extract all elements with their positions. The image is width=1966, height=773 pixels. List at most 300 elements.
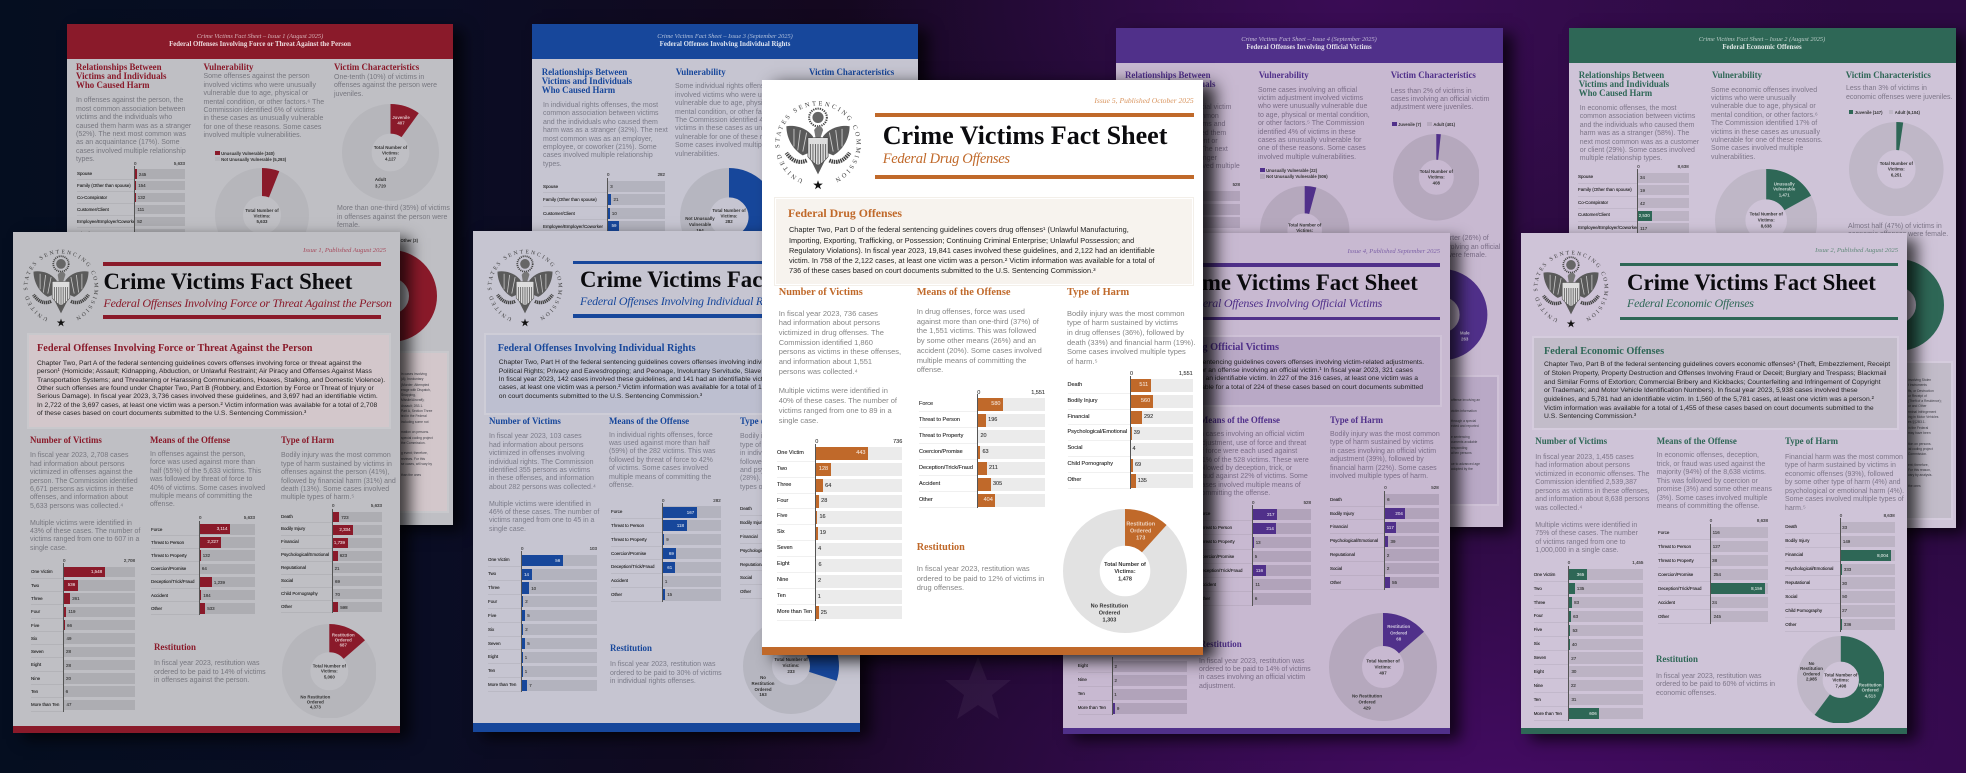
panel: front page, force or threat (red): 0	[332, 503, 334, 508]
overview heading: Federal Drug Offenses	[788, 206, 902, 220]
text: type of harm: and psychological or emotional harm	[740, 467, 854, 474]
text: relationships: as an acquaintance (17%). Some	[76, 139, 180, 146]
donut: vulnerability: 164	[696, 228, 704, 233]
text: means: trick, or fraud was used against the	[1657, 461, 1765, 468]
bar chart: type of harm: Social	[1785, 594, 1797, 599]
bar chart: type of harm: Bodily Injury	[1785, 538, 1809, 543]
bar chart: means: Other	[611, 592, 622, 597]
bar chart: number of victims: 4	[818, 546, 821, 552]
bar chart: means: 580	[991, 401, 1000, 407]
text: vulnerability: vulnerabilities.	[1711, 154, 1755, 161]
text: means	[609, 432, 715, 490]
bar chart: type of harm: Social	[1330, 566, 1342, 571]
bar chart: type of harm: 204	[1395, 511, 1403, 516]
text: vulnerability: Some economic offenses involved	[1711, 87, 1817, 94]
donut: restitution: 7,498	[1835, 683, 1846, 688]
text: type of harm: of harm.⁵	[1067, 357, 1098, 366]
bar chart: relationships: Co-Conspirator	[1578, 200, 1608, 205]
bar chart: number of victims: 25	[821, 610, 827, 616]
overview text: Chapter Two, Part H of the federal sentencing guidelines covers offenses involving individual rights (Civil Rights;	[499, 359, 834, 366]
bar chart: type of harm: 8,004	[1877, 553, 1888, 558]
bar chart: number of victims: More than Ten	[1078, 705, 1106, 710]
text: number of victims: 46% of these cases. The number of	[489, 509, 599, 516]
text: restitution: In fiscal year 2023, restitution was	[1656, 673, 1761, 680]
text: vulnerability: mental condition, or other factors.⁶	[1711, 112, 1818, 119]
text: number of victims: persons was collected.⁴	[779, 367, 858, 376]
text: means: followed by threat of force to 42%	[609, 457, 713, 464]
donut: vulnerability: Victims:	[1757, 218, 1775, 223]
header issue line: Crime Victims Fact Sheet – Issue 2 (August 2025)	[1699, 36, 1825, 43]
footnotes: than the ones	[401, 473, 421, 477]
bar chart: number of victims: 606	[1589, 711, 1597, 716]
bar chart: number of victims: Three	[1534, 600, 1545, 605]
bar chart: number of victims: Five	[31, 623, 39, 628]
donut: restitution: Victims:	[1832, 677, 1849, 682]
footer band	[13, 726, 400, 733]
donut: restitution: Restitution	[752, 681, 775, 686]
bar chart: type of harm: 30	[1842, 581, 1847, 586]
bar chart: number of victims: Four	[1534, 613, 1543, 618]
text: vulnerability: identified 4% of victims in these	[1258, 129, 1356, 136]
subtitle: Federal Offenses Involving Official Victims	[1185, 296, 1382, 310]
text: type of harm: type of harm sustained by victims in	[1785, 462, 1896, 469]
overview text: Chapter Two, Part B of the federal sentencing guidelines covers economic offenses¹ (Theft, Embezzlement, Receipt	[1544, 361, 1890, 368]
bar chart: number of victims: Nine	[1534, 683, 1543, 688]
panel: notes	[300, 353, 447, 511]
text: vulnerability: to age, physical or mental condition,	[1258, 112, 1370, 119]
text: relationships: employee, or coworker (21%). Some	[543, 144, 657, 151]
text: female share	[1848, 222, 1948, 238]
bar chart: relationships: 10	[612, 211, 617, 216]
background star watermark	[946, 663, 1010, 718]
text: vulnerability: or other factors.⁵ The Commission	[1258, 120, 1364, 127]
heading: relationships: Relationships Between	[1125, 70, 1211, 80]
bar chart: type of harm: Death	[740, 506, 752, 511]
bar chart: type of harm: 117	[1387, 525, 1394, 530]
text: juveniles	[334, 74, 437, 98]
subtitle: Federal Offenses Involving Force or Threat Against the Person	[104, 296, 392, 310]
heading: relationships: Who Caused Harm	[1125, 88, 1198, 98]
text: restitution	[154, 660, 266, 686]
heading: relationships: Victims and Individuals	[1579, 79, 1669, 89]
bar chart: relationships: 59	[612, 223, 616, 228]
heading: relationships	[76, 62, 166, 90]
donut: restitution: Victims:	[782, 663, 800, 668]
donut: sex	[400, 250, 437, 341]
text: vulnerability: involved multiple vulnerabilities.	[1258, 154, 1356, 161]
bar chart: relationships: Friend	[77, 231, 90, 236]
text: means: multiple means of committing the	[609, 474, 711, 481]
heading: type of harm: Type of Harm	[740, 416, 793, 426]
bar chart: means: 8,156	[1751, 586, 1762, 591]
bar chart: relationships: Spouse	[77, 171, 92, 176]
text: means: followed by deception, trick, or	[1198, 465, 1292, 472]
legend: vulnerability: Unusually Vulnerable (340)	[221, 150, 274, 156]
text: restitution: ordered to be paid to 60% of victims in	[1656, 681, 1775, 688]
bar chart: means: Coercion/Promise	[1658, 572, 1693, 577]
text: female share: victim adjustment were female.	[1391, 252, 1487, 259]
bar chart: means: 69	[669, 551, 674, 556]
panel: back page, individual rights (blue): 0	[607, 172, 609, 177]
title rule top	[875, 113, 1194, 117]
text: number of victims: victimized in offenses involving	[489, 450, 585, 457]
panel: front page, force or threat (red): 5,633	[244, 515, 255, 520]
title rule bottom	[875, 175, 1194, 179]
text: juveniles: cases involving an official victim	[1391, 96, 1489, 103]
bar chart: type of harm	[1785, 520, 1891, 632]
footer band	[762, 647, 1203, 655]
bar chart: number of victims: 9	[1117, 706, 1119, 711]
text: restitution: ordered to be paid to 14% of victims	[154, 669, 266, 676]
donut: vulnerability: Total Number of	[1749, 212, 1783, 217]
bar chart: type of harm: 69	[1135, 462, 1141, 468]
heading: relationships: Relationships Between	[542, 67, 627, 77]
bar chart: means: 6	[1255, 596, 1257, 601]
title rule top	[1162, 263, 1440, 267]
bar chart: means: 211	[989, 465, 998, 471]
panel: front page, economic offenses (green): 0	[1568, 560, 1570, 565]
text: number of victims: victims ranged from one to 45 in a	[489, 517, 594, 524]
seal: UNITED STATES SENTENCING COMMISSION	[488, 250, 562, 322]
bar chart: type of harm: Child Pornography	[1785, 608, 1822, 613]
bar chart: means: Threat to Property	[1199, 539, 1235, 544]
text: type of harm: death (33%) and financial harm (19%).	[1067, 338, 1195, 347]
donut: vulnerability: 1,471	[1778, 193, 1790, 198]
text: vulnerability: vulnerable due to age, physical or	[1711, 103, 1816, 110]
title: Crime Victims Fact Sheet	[1169, 270, 1418, 295]
bar chart: means: Coercion/Promise	[919, 449, 963, 455]
text: number of victims: was collected.⁴	[1535, 505, 1582, 512]
bar chart: means: Accident	[1658, 600, 1675, 605]
bar chart: number of victims	[488, 553, 563, 692]
bar chart: number of victims: 28	[821, 498, 827, 504]
bar chart: relationships: 34	[1640, 175, 1645, 180]
header band	[532, 24, 918, 59]
text: number of victims: single case.	[779, 416, 818, 425]
footnotes: tion on persons.	[1908, 442, 1931, 446]
footnotes	[1908, 378, 1942, 488]
bar chart: number of victims: More than Ten	[777, 609, 812, 615]
overview text	[1000, 359, 1424, 392]
footnotes: Part A, Section Three	[401, 409, 432, 413]
overview text: U.S. Sentencing Commission.³	[1544, 413, 1636, 420]
text: vulnerability: one of these reasons. Some cases	[1258, 145, 1366, 152]
donut: age: Total Number of	[373, 144, 407, 150]
text: means: of force were each used against	[1198, 448, 1297, 455]
heading: means: Means of the Offense	[150, 435, 230, 445]
bar chart: relationships: Employee/Employer/Coworker	[1578, 225, 1638, 230]
panel: front page, official victims (purple): 528	[1304, 500, 1311, 505]
overview text	[789, 225, 1155, 277]
panel: overview	[29, 335, 389, 427]
bar chart: type of harm: Reputational	[1330, 552, 1355, 557]
donut: age: 407	[397, 120, 405, 125]
bar chart: type of harm: Other	[281, 604, 292, 609]
footnotes: (A); Involuntary	[401, 377, 423, 381]
footnotes: ected and reported	[1451, 424, 1479, 428]
bar chart: type of harm: Bodily Injury	[1330, 511, 1354, 516]
bar chart: means: Threat to Person	[919, 417, 960, 423]
panel: back page, economic offenses (green)	[1569, 28, 1956, 528]
text: relationships: victims and the individuals who	[76, 114, 172, 121]
footnotes: ffs, or Destruction	[1908, 389, 1934, 393]
title rule bottom	[1620, 317, 1898, 320]
donut: restitution: No Restitution	[1091, 603, 1129, 609]
text: relationships: In cases involving an official victim	[1125, 104, 1231, 111]
bar chart: relationships: Customer/Client	[77, 207, 109, 212]
bar chart: number of victims: 66	[67, 623, 72, 628]
overview text: Chapter Two, Part A of the federal sentencing guidelines covers offenses involving victim-related adjustments.	[1096, 359, 1424, 366]
text: number of victims	[779, 309, 901, 425]
bar chart: type of harm	[1330, 493, 1405, 590]
overview text: on court documents submitted to the U.S. Sentencing Commission.³	[499, 393, 702, 400]
text: juveniles: adjustment were juveniles.	[1391, 104, 1473, 111]
donut: vulnerability: Not Unusually	[685, 216, 715, 221]
bar chart: number of victims: 2	[1114, 664, 1117, 669]
donut: age: Victims:	[1428, 175, 1445, 180]
bar chart: type of harm: 333	[1844, 567, 1851, 572]
text: means: was used against more than half	[609, 440, 710, 447]
overview text: In 2,722 of the 3,697 cases, at least one victim was a person.² Victim information was available for a total of 2,708	[37, 402, 377, 409]
panel: center page, federal drug offenses (orange): 1,551	[1031, 390, 1045, 396]
bar chart: number of victims: Six	[488, 627, 494, 632]
text: means: adjustment, use of force and threat	[1198, 440, 1306, 447]
bar chart: means: Threat to Person	[1658, 544, 1691, 549]
bar chart: number of victims: 83	[1574, 600, 1579, 605]
text: vulnerability: cases as unusually vulnerable for	[1258, 137, 1362, 144]
text: vulnerability: vulnerable for one of these reasons.	[1711, 137, 1823, 144]
bar chart: means	[151, 523, 230, 615]
text: type of harm: adjustment (39%), followed by	[1330, 456, 1424, 463]
heading: vulnerability: Vulnerability	[676, 67, 726, 77]
panel: front page, official victims (purple)	[1063, 233, 1450, 734]
text: vulnerability: victims in these cases as unusually	[675, 125, 784, 132]
bar chart: means: Deception/Trick/Fraud	[1199, 568, 1242, 573]
bar chart: means: 3,114	[217, 526, 228, 531]
bar chart: number of victims: Eight	[1078, 663, 1088, 668]
text: number of victims: In fiscal year 2023, 736 cases	[779, 309, 878, 318]
bar chart: relationships: Spouse	[1578, 174, 1593, 179]
bar chart: number of victims: 40	[1572, 642, 1577, 647]
bar chart: type of harm: 598	[340, 605, 348, 610]
bar chart: number of victims: One Victim	[777, 450, 804, 456]
donut: restitution: Victims:	[1374, 664, 1392, 669]
text: relationships: adjustment, the most common	[1125, 113, 1219, 120]
donut: vulnerability: 8,638	[1760, 224, 1772, 229]
panel: front page, individual rights (blue)	[473, 231, 860, 732]
text: type of harm: economic offenses (93%), followed	[1785, 471, 1893, 478]
text: restitution: in cases involving an official victim	[1199, 674, 1305, 681]
bar chart: type of harm: Financial	[281, 539, 299, 544]
text: juveniles: economic offenses were juveniles.	[1846, 94, 1952, 101]
text: type of harm: types of harm.⁵	[740, 484, 787, 491]
overview heading: Federal Offenses Involving Official Victims	[1089, 342, 1279, 353]
text: number of victims: had information about persons	[1535, 462, 1630, 469]
text: means: In drug offenses, force was used	[917, 307, 1025, 316]
heading: relationships: Relationships Between	[1579, 70, 1664, 80]
text: relationships: association between victims and	[1125, 121, 1225, 128]
bar chart: number of victims: 53	[1573, 628, 1578, 633]
text: female share	[337, 204, 450, 229]
title rule bottom	[573, 314, 851, 318]
bar chart: type of harm: Financial	[1330, 524, 1348, 529]
heading: restitution: Restitution	[154, 642, 196, 652]
text: relationships: and the individuals who caused them	[543, 119, 658, 126]
text: vulnerability: Some offenses against the person	[204, 73, 310, 80]
bar chart: relationships: 132	[138, 195, 145, 200]
issue date: Issue 1, Published August 2025	[303, 247, 386, 254]
text: type of harm	[1067, 309, 1195, 367]
text: type of harm: in drug offenses (36%), followed by	[1067, 328, 1184, 337]
bar chart: relationships: 111	[137, 207, 144, 212]
text: means: committing the offense.	[1198, 490, 1270, 497]
bar chart: type of harm: Child Pornography	[281, 591, 318, 596]
bar chart: means: 20	[980, 433, 987, 439]
bar chart: means: Other	[151, 606, 162, 611]
donut: restitution: Restitution	[1387, 624, 1410, 629]
text: relationships: and the individuals who caused them	[1580, 122, 1694, 129]
bar chart: number of victims: Ten	[488, 668, 495, 673]
donut: restitution: 1,303	[1103, 617, 1117, 623]
text: relationships: the individuals who caused them	[1125, 130, 1226, 137]
bar chart: number of victims	[1534, 568, 1599, 721]
bar chart: relationships: 42	[1640, 200, 1645, 206]
heading: relationships: Who Caused Harm	[76, 80, 149, 90]
bar chart: type of harm: Financial	[1068, 414, 1090, 420]
bar chart: means: Deception/Trick/Fraud	[919, 465, 973, 471]
legend: vulnerability: Not Unusually Vulnerable (506)	[1266, 174, 1328, 179]
bar chart: number of victims: Two	[777, 466, 787, 472]
donut: restitution	[1796, 636, 1884, 723]
panel: front page, official victims (purple): 0	[1252, 500, 1254, 505]
footnotes: cuments available	[1451, 440, 1477, 444]
bar chart: number of victims: 6	[818, 562, 822, 568]
panel: back page, official victims (purple)	[1116, 28, 1503, 527]
text: vulnerability: Some cases involving an official	[1258, 87, 1357, 94]
text: relationships: In offenses against the person, the	[76, 97, 183, 104]
heading: type of harm: Type of Harm	[1330, 415, 1383, 425]
bar chart: type of harm: 336	[1844, 622, 1851, 627]
subtitle: Federal Drug Offenses	[883, 151, 1010, 167]
text: vulnerability: victims in these cases as unusually	[1711, 129, 1820, 136]
text: number of victims: 43% of these cases. The number of	[30, 528, 140, 535]
bar chart: number of victims: 2	[525, 627, 528, 632]
bar chart: type of harm: 149	[1843, 539, 1850, 544]
bar chart: number of victims: 128	[819, 466, 828, 472]
header title line: Federal Economic Offenses	[1722, 44, 1802, 51]
title rule top	[103, 262, 381, 266]
bar chart: number of victims: Ten	[1078, 691, 1085, 696]
bar chart: number of victims: 22	[1571, 683, 1576, 688]
panel: back page, force or threat (red): 0	[134, 161, 136, 166]
text: juveniles: juveniles.	[334, 91, 363, 98]
donut: restitution: Total Number of	[774, 657, 808, 662]
footnotes: ue to advanced age	[1451, 462, 1480, 466]
text: type of harm: Bodily injury was the most common	[740, 433, 850, 440]
footnotes: responding	[1451, 446, 1467, 450]
donut: restitution	[1329, 613, 1437, 721]
donut: vulnerability: Unusually	[1773, 182, 1795, 187]
text: type of harm: psychological or emotional harm (4%).	[1785, 488, 1904, 495]
text: means: means of committing the offense.	[1657, 503, 1760, 510]
footnotes: Commission.	[1908, 452, 1927, 456]
bar chart: number of victims: Ten	[31, 689, 38, 694]
bar chart: type of harm: 6	[1387, 497, 1390, 502]
footnotes: e sentencing	[1451, 435, 1470, 439]
text: vulnerability	[204, 72, 324, 139]
bar chart: number of victims: 49	[66, 636, 71, 641]
panel: back page, official victims (purple): 0	[1190, 182, 1192, 187]
seal: UNITED STATES SENTENCING COMMISSION	[24, 250, 98, 322]
overview text: information was available for a total of 224 of these cases based on court documents submitted	[1138, 384, 1423, 391]
heading: means: Means of the Offense	[917, 287, 1010, 298]
text: number of victims: victimized in offenses against the	[30, 469, 133, 476]
bar chart: type of harm: Reputational	[740, 562, 765, 567]
bar chart: type of harm	[1068, 378, 1153, 489]
text: juveniles	[1846, 84, 1952, 101]
overview text: In fiscal year 2023, 142 cases involved these guidelines, and 141 had an identifiable victim. In 102 of the 141	[499, 376, 824, 383]
footnotes	[401, 372, 433, 477]
bar chart: number of victims: 14	[524, 572, 529, 577]
text: juveniles: Less than 2% of victims in	[1391, 88, 1472, 95]
panel: front page, force or threat (red): 0	[199, 515, 201, 520]
text: relationships	[1580, 104, 1699, 162]
text: type of harm: type of harm sustained by victims	[1067, 318, 1178, 327]
text: means: (3%). Some cases involved multiple	[1657, 495, 1768, 502]
text: means	[1198, 431, 1309, 499]
text: relationships: most common was as an employer,	[543, 136, 653, 143]
bar chart: number of victims: Three	[31, 596, 43, 601]
header band	[1569, 28, 1956, 63]
bar chart: means: Force	[1199, 511, 1210, 516]
donut: restitution: Ordered	[1099, 610, 1120, 616]
donut: restitution: 5,060	[324, 674, 335, 679]
overview text: Chapter Two, Part D of the federal sentencing guidelines covers drug offenses¹ (Unlawful Manufacturing,	[789, 225, 1129, 234]
bar chart: means: 118	[677, 523, 684, 528]
text: relationships: multiple relationship types.	[1580, 155, 1662, 162]
bar chart: type of harm: Psychological/Emotional	[1068, 429, 1127, 435]
bar chart: relationships: Co-Conspirator	[77, 195, 107, 200]
footnotes: al ten persons	[1451, 451, 1472, 455]
text: relationships: cases involved multiple relationship	[76, 148, 186, 155]
footnotes: offense involving an	[1451, 398, 1480, 402]
bar chart: number of victims: Six	[31, 636, 37, 641]
text: number of victims: of victims ranged from one to	[1535, 539, 1626, 546]
bar chart: means	[611, 505, 697, 602]
text: type of harm	[281, 452, 396, 503]
header issue line: Crime Victims Fact Sheet – Issue 4 (September 2025)	[1241, 36, 1377, 43]
bar chart: means: 127	[1713, 544, 1720, 549]
bar chart: relationships	[1125, 189, 1190, 229]
donut: age: Total Number of	[1880, 161, 1913, 166]
donut: restitution: No Restitution	[300, 694, 330, 699]
panel: front page, individual rights (blue): 282	[713, 498, 721, 503]
bar chart: number of victims	[1078, 659, 1119, 715]
footnotes: For this reason,	[1908, 468, 1931, 472]
text: type of harm: type of harm sustained by victims	[740, 442, 844, 449]
bar chart: means: Threat to Property	[919, 433, 963, 439]
donut: sex: 263	[1461, 337, 1469, 342]
bar chart: means: Force	[1658, 530, 1669, 535]
bar chart: number of victims: One Victim	[31, 569, 53, 574]
text: vulnerability: vulnerabilities.	[675, 151, 719, 158]
text: juveniles: One-tenth (10%) of victims in	[334, 74, 424, 81]
bar chart: number of victims: Seven	[488, 641, 501, 646]
bar chart: number of victims: 1	[525, 655, 527, 660]
text: means: accident (20%). Some cases involved	[917, 346, 1042, 355]
footer band	[1063, 728, 1450, 734]
footnotes: reviews. For this	[401, 457, 425, 461]
